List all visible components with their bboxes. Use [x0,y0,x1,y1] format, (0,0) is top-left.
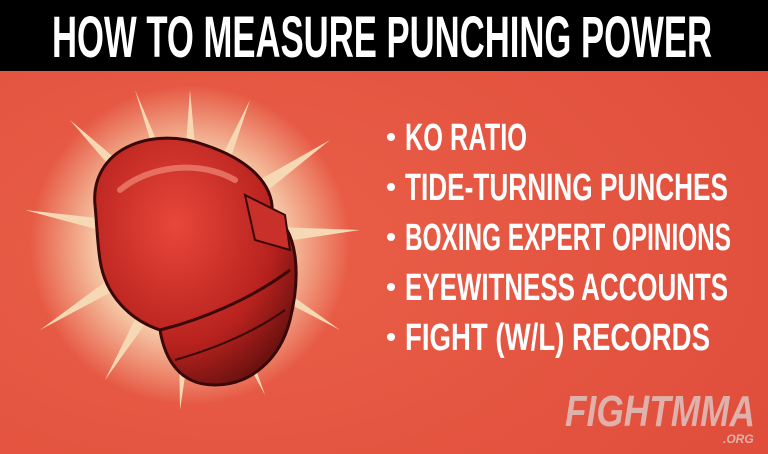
logo: .ORG [723,432,754,446]
bullet list [387,117,731,359]
icon: boxing glove [95,138,296,385]
bullet: KO ratio: KO RATIO [405,117,527,159]
bullet: KO ratio [387,117,527,159]
icon: starburst [25,85,360,410]
